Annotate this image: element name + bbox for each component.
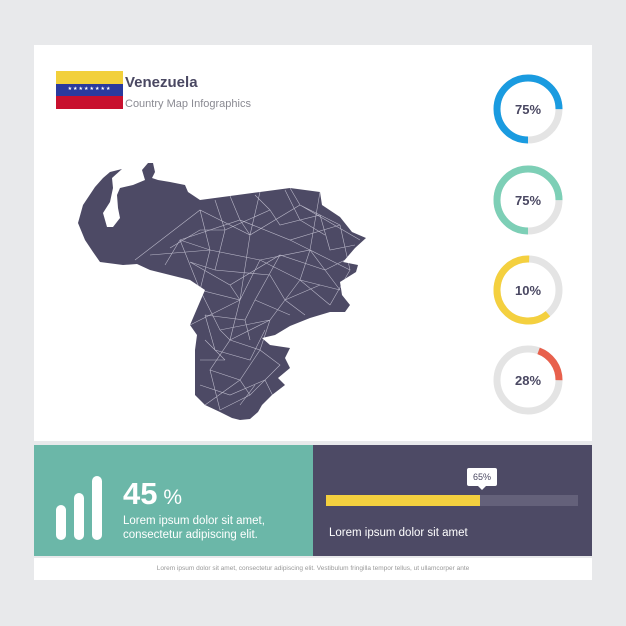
donut 4: 28%: 28% (515, 373, 541, 388)
footer: Lorem ipsum dolor sit amet, consectetur adipiscing elit. Vestibulum fringilla tempor tellus, ut ullamcorper ante (157, 565, 469, 572)
donut 2: 75% (494, 166, 562, 234)
flag: ★★★★★★★★ (68, 86, 111, 92)
panel: progress (313, 445, 592, 556)
footer (34, 558, 592, 580)
donut 4: 28% (494, 346, 562, 414)
text: Lorem ipsum dolor sit amet, (123, 515, 265, 527)
donut 1: 75%: 75% (515, 102, 541, 117)
main card (34, 45, 592, 441)
panel: teal stats (34, 445, 313, 556)
text: consectetur adipiscing elit. (123, 529, 258, 541)
flag (56, 71, 123, 109)
stat 45%: 45 % (123, 476, 182, 511)
subtitle: Country Map Infographics (125, 98, 251, 110)
donut 3: 10%: 10% (515, 283, 541, 298)
title: Venezuela (125, 74, 198, 91)
donut 2: 75%: 75% (515, 193, 541, 208)
tooltip 65%: 65% (473, 472, 491, 482)
progress bar (326, 495, 578, 506)
donut 1: 75% (494, 74, 562, 144)
map: Venezuela (78, 163, 366, 420)
icon: bar chart (56, 476, 102, 540)
donut 3: 10% (494, 256, 562, 324)
text: Lorem ipsum dolor sit amet (329, 527, 468, 539)
tooltip 65% (467, 468, 497, 486)
text (123, 515, 265, 541)
